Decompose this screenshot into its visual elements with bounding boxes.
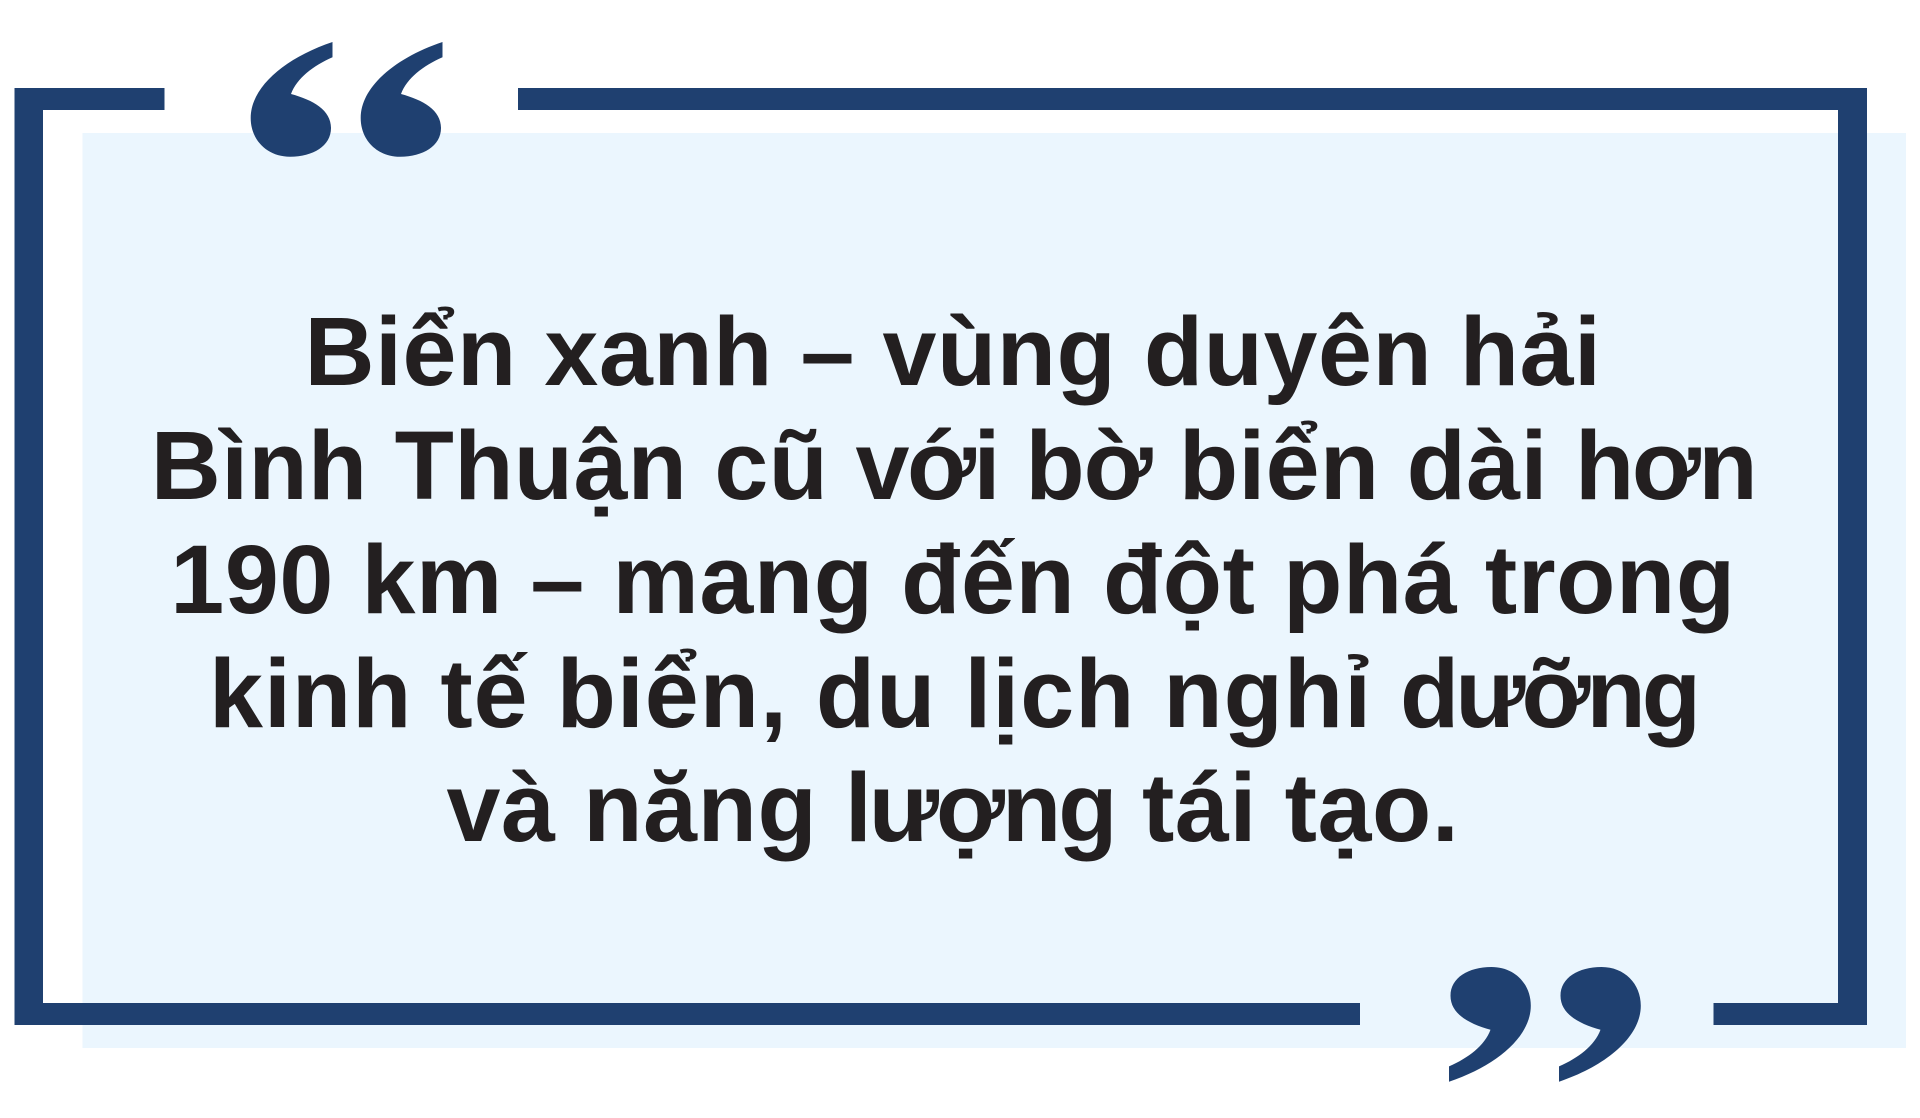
quote text: Biển xanh – vùng duyên hải — [304, 297, 1602, 406]
quote text: Bình Thuận cũ với bờ biển dài hơn — [151, 411, 1755, 520]
icon: opening quotation mark — [251, 42, 442, 157]
quote text: 190 km – mang đến đột phá trong — [170, 525, 1736, 634]
icon: closing quotation mark — [1449, 967, 1641, 1082]
quote text: và năng lượng tái tạo. — [447, 753, 1459, 862]
quote text: kinh tế biển, du lịch nghỉ dưỡng — [209, 639, 1697, 748]
panel: light blue background — [82, 133, 1906, 1048]
quote text — [151, 297, 1755, 862]
